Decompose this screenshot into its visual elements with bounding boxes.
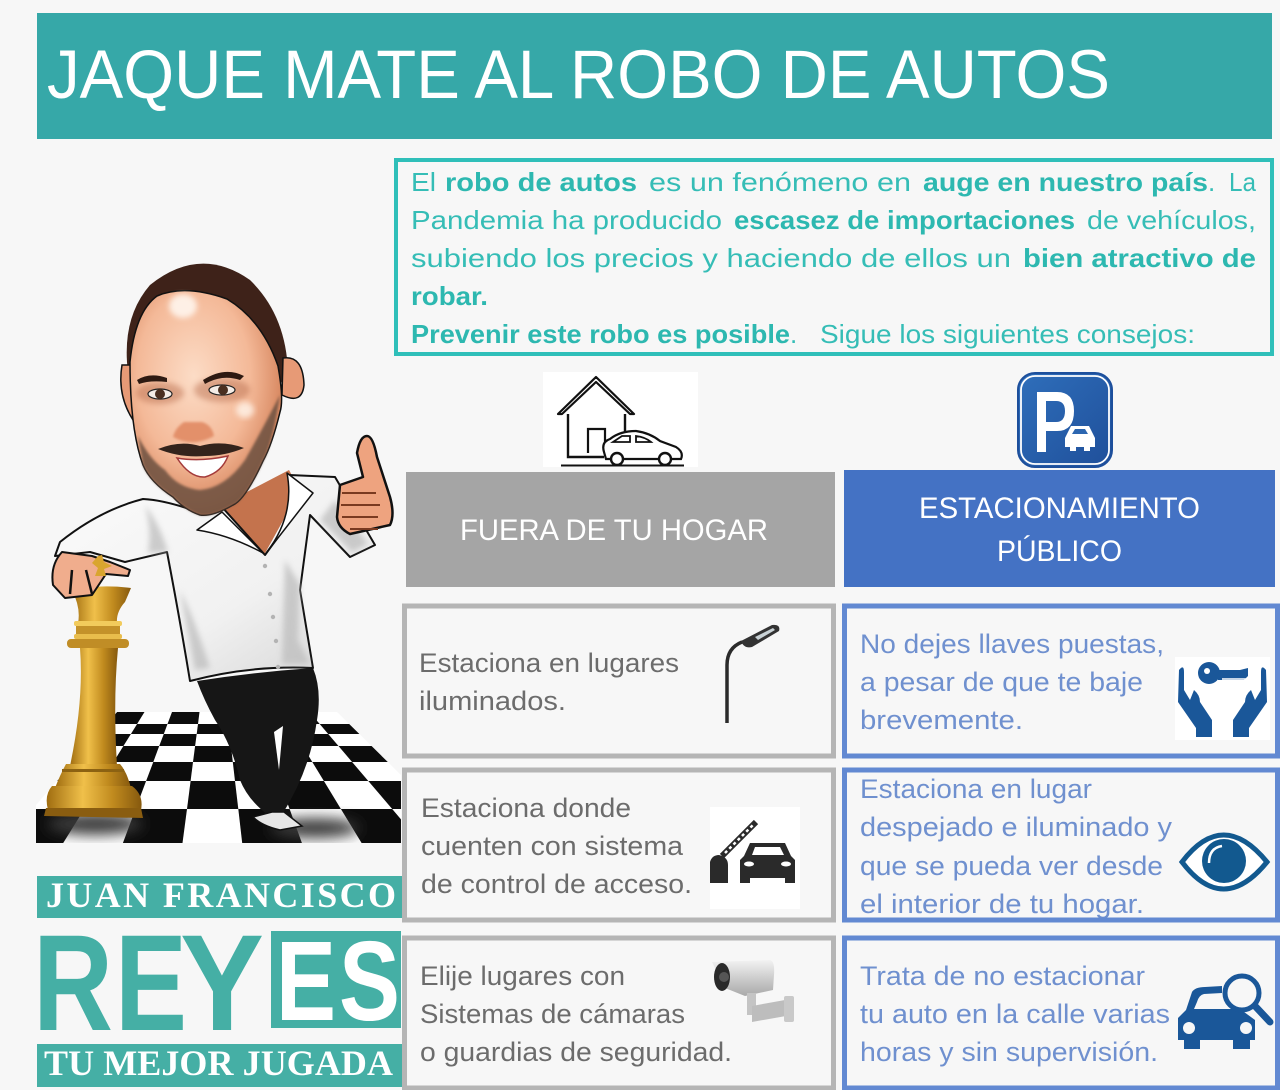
left hand on king	[52, 552, 130, 598]
intro text box: .	[790, 319, 797, 349]
card: iluminados: iluminados.	[419, 686, 566, 716]
card: sin supervision: horas y sin supervisión.	[860, 1037, 1158, 1067]
intro text box: robo de autos	[445, 167, 637, 197]
logo wordmark: R	[33, 907, 113, 1060]
header: estacionamiento publico: PÚBLICO	[997, 535, 1122, 568]
eyes	[148, 385, 235, 399]
intro text box: Pandemia ha producido	[411, 205, 722, 235]
nose	[173, 422, 214, 442]
card: control de acceso: cuenten con sistema	[421, 831, 684, 861]
cheek highlight	[236, 402, 254, 418]
illustration: caricature with chess king on board	[36, 264, 401, 843]
card: sin supervision: tu auto en la calle varias	[860, 999, 1170, 1029]
card: camaras: o guardias de seguridad.	[420, 1037, 732, 1067]
card: lugar despejado: despejado e iluminado y	[860, 812, 1173, 842]
header: estacionamiento publico: ESTACIONAMIENTO	[919, 492, 1200, 525]
forehead highlight	[169, 294, 197, 318]
logo wordmark: E	[276, 918, 336, 1044]
logo: Juan Francisco Reyes	[33, 875, 402, 1087]
intro text box: subiendo los precios y haciendo de ellos un	[411, 243, 1011, 273]
card: lugar despejado: Estaciona en lugar	[860, 774, 1092, 804]
card: llaves: brevemente.	[860, 705, 1023, 735]
shirt	[55, 475, 375, 681]
intro text box: Sigue los siguientes consejos:	[820, 319, 1195, 349]
shirt folds	[145, 500, 368, 670]
card: lugar despejado: el interior de tu hogar.	[860, 889, 1144, 919]
intro text box: .	[1208, 167, 1215, 197]
icon: security camera	[712, 960, 794, 1022]
intro text box	[396, 160, 1272, 354]
shirt collar	[197, 473, 313, 553]
intro text box: La	[1229, 167, 1257, 197]
intro text box: auge en nuestro país	[923, 167, 1208, 197]
header: fuera de tu hogar	[406, 472, 835, 587]
card: sin supervision	[844, 938, 1278, 1088]
icon: barrier and car	[710, 807, 800, 909]
beard	[138, 395, 280, 515]
intro text box: bien atractivo de	[1023, 243, 1256, 273]
card: camaras: Sistemas de cámaras	[420, 999, 685, 1029]
logo wordmark: E	[115, 907, 187, 1060]
hair	[127, 264, 288, 400]
card: llaves: No dejes llaves puestas,	[860, 629, 1164, 659]
title banner: JAQUE MATE AL ROBO DE AUTOS	[47, 36, 1110, 113]
title banner	[37, 13, 1272, 139]
card: iluminados: Estaciona en lugares	[419, 648, 679, 678]
card: llaves: a pesar de que te baje	[860, 667, 1143, 697]
card: control de acceso: de control de acceso.	[421, 869, 692, 899]
icon: house and car	[543, 372, 698, 467]
shoe	[253, 812, 302, 830]
header: fuera de tu hogar: FUERA DE TU HOGAR	[460, 514, 768, 547]
logo top band: JUAN FRANCISCO	[46, 875, 396, 915]
card: camaras	[404, 938, 834, 1088]
face	[130, 291, 282, 515]
icon: hands holding key	[1175, 657, 1270, 740]
logo wordmark: Y	[180, 907, 264, 1060]
icon: eye	[1182, 835, 1267, 889]
card: iluminados	[404, 606, 834, 756]
chess king	[44, 586, 143, 818]
intro text box: es un fenómeno en	[649, 167, 911, 197]
header: estacionamiento publico	[844, 470, 1275, 587]
shirt buttons	[263, 564, 280, 669]
logo bottom band: TU MEJOR JUGADA	[44, 1043, 393, 1083]
icon: parking sign	[1018, 373, 1112, 467]
smile	[177, 456, 228, 477]
logo wordmark: S	[339, 918, 400, 1044]
card: sin supervision: Trata de no estacionar	[860, 961, 1145, 991]
intro text box: robar.	[411, 281, 488, 311]
brows	[137, 372, 244, 384]
intro text box: escasez de importaciones	[734, 205, 1075, 235]
intro text box: El	[411, 167, 436, 197]
card: control de acceso	[404, 770, 834, 920]
card: camaras: Elije lugares con	[420, 961, 625, 991]
card: lugar despejado: que se pueda ver desde	[860, 851, 1163, 881]
intro text box: de vehículos,	[1087, 205, 1256, 235]
intro text box: Prevenir este robo es posible	[411, 319, 790, 349]
card: lugar despejado	[844, 770, 1278, 920]
logo wordmark	[33, 907, 401, 1060]
icon: car with magnifier	[1178, 976, 1270, 1049]
pants	[197, 668, 319, 815]
icon: street lamp	[727, 625, 779, 723]
card: llaves	[844, 606, 1278, 756]
chessboard	[36, 712, 401, 843]
right hand thumbs up	[337, 436, 392, 534]
card: control de acceso: Estaciona donde	[421, 793, 631, 823]
neck	[222, 470, 300, 555]
ears	[121, 358, 304, 420]
eye sockets shading	[136, 378, 250, 404]
gap between legs	[274, 726, 283, 770]
moustache	[158, 443, 244, 456]
